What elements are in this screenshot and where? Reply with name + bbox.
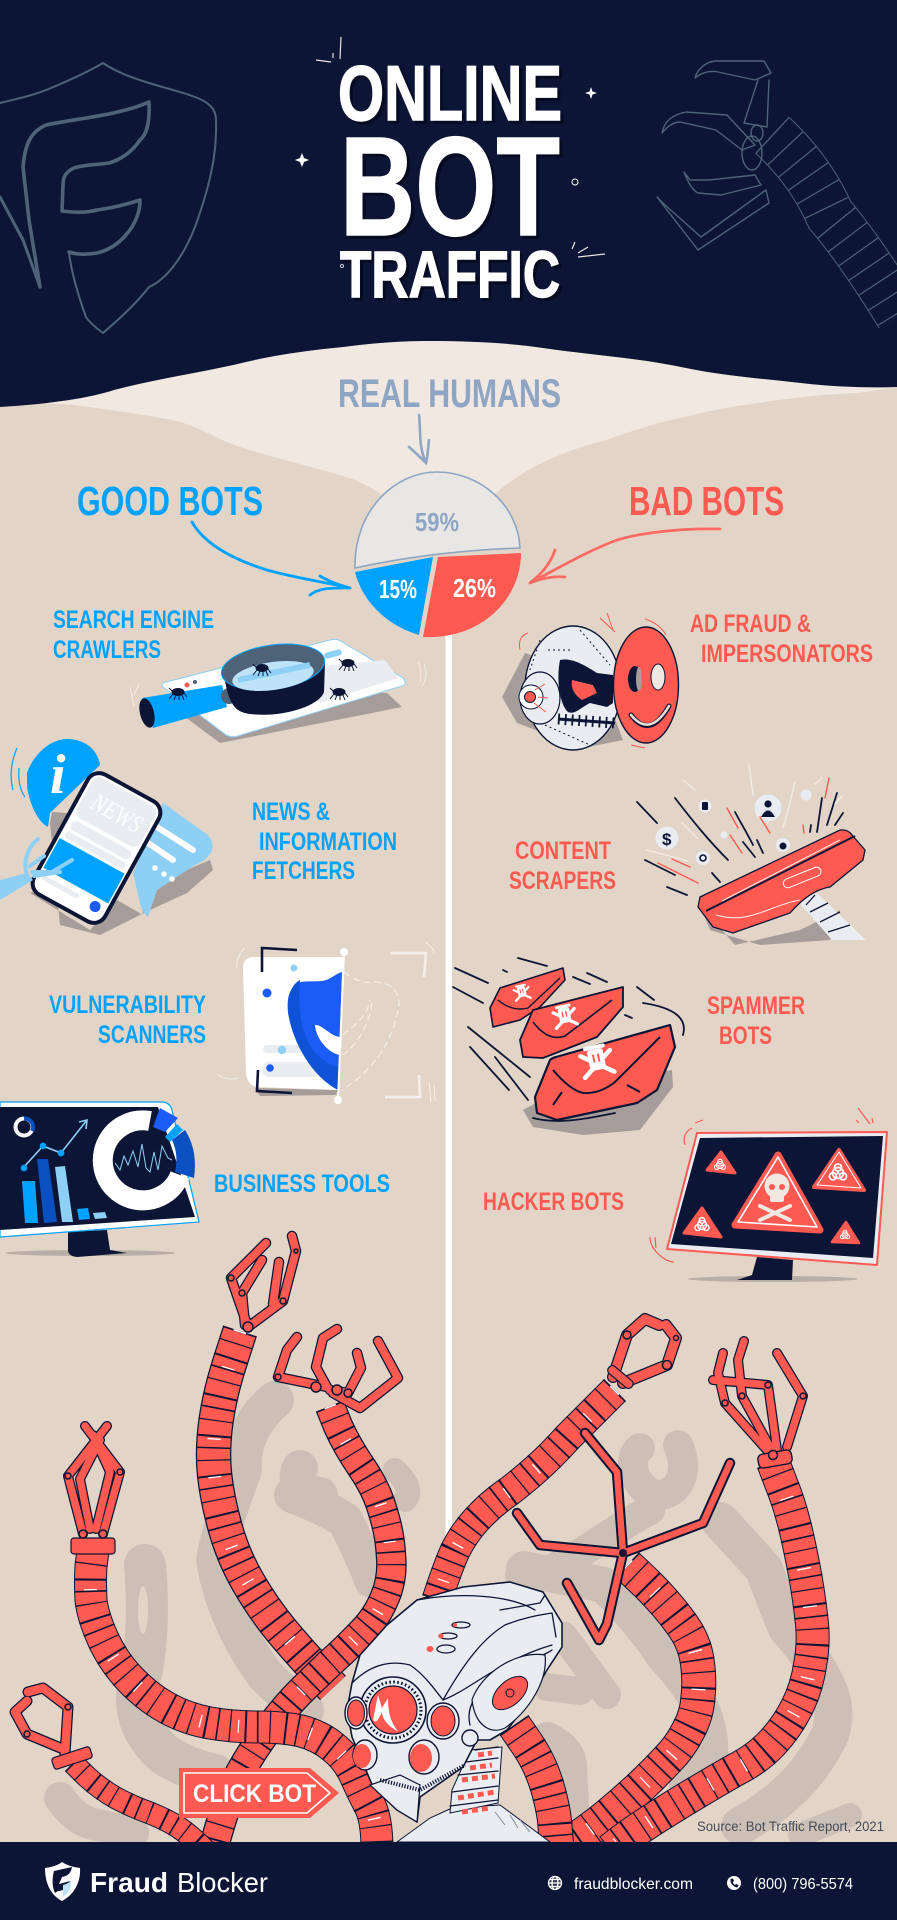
- pie chart: [355, 472, 521, 637]
- contact: phone number: (800) 796-5574: [753, 1876, 853, 1893]
- robot hand: [0, 873, 33, 900]
- pie value 15%: 15%: [379, 574, 417, 604]
- info speech bubble: [27, 739, 100, 827]
- robot arm with long finger claw: [610, 1341, 813, 1850]
- heading: real humans: REAL HUMANS: [338, 372, 561, 416]
- logo: wordmark second part: Blocker: [177, 1867, 268, 1898]
- logo: shield: [45, 1862, 80, 1901]
- good bots labels: INFORMATION: [259, 828, 397, 856]
- title: TRAFFIC: [340, 237, 560, 311]
- robot head: [345, 1582, 562, 1822]
- good bots labels: SEARCH ENGINE: [53, 606, 214, 634]
- donut chart: [103, 1108, 195, 1200]
- jaw: [370, 1775, 420, 1822]
- icon: robot claw sketch: [657, 61, 897, 315]
- header: navy wave panel: [0, 0, 897, 407]
- icon: phone: [727, 1876, 741, 1890]
- bad bots labels: BOTS: [719, 1022, 772, 1050]
- arrow: good bots to pie: [192, 522, 350, 595]
- good bots labels: BUSINESS TOOLS: [214, 1170, 390, 1198]
- robot arm with round pincer: [437, 1319, 678, 1600]
- robot arm with diamond claw: [65, 1426, 377, 1850]
- icon: globe: [548, 1876, 562, 1890]
- bad bots labels: [483, 610, 873, 1216]
- good bots labels: FETCHERS: [252, 857, 355, 885]
- icon: smartphone with news: i: [50, 744, 66, 806]
- icon: vacuum scraper: [637, 765, 866, 945]
- title: ONLINE: [338, 49, 562, 137]
- heading: good bots: GOOD BOTS: [77, 478, 263, 524]
- contact: website: fraudblocker.com: [574, 1876, 693, 1893]
- good bots labels: CRAWLERS: [53, 636, 161, 664]
- arrow: bad bots to pie: [530, 529, 720, 583]
- title: BOT: [340, 107, 560, 265]
- half shield: [288, 972, 342, 1090]
- click bot sign: [179, 1768, 339, 1818]
- heading: bad bots: BAD BOTS: [629, 478, 784, 524]
- arrow: real humans to pie: [409, 415, 429, 463]
- side disc: [472, 1654, 545, 1730]
- shadow: robot arms on background: [60, 1400, 850, 1842]
- icon: magnifying glass over tablet: [130, 638, 426, 743]
- illustration: click bot robot: [15, 1236, 813, 1850]
- robot arm with pincer claw: [15, 1688, 205, 1850]
- click bot sign: CLICK BOT: [193, 1780, 316, 1808]
- main eye: [360, 1677, 426, 1743]
- icon: robot skull and smiley mask: [502, 613, 678, 750]
- good bots labels: NEWS &: [252, 798, 330, 826]
- line chart: [21, 1120, 87, 1171]
- bad bots labels: CONTENT: [515, 837, 611, 865]
- icon: smartphone with news: [0, 739, 213, 935]
- robot arm with star claw: [517, 1433, 730, 1850]
- divider: white centre line: [446, 630, 452, 1590]
- icon: shield sketch: [0, 63, 216, 333]
- pie slice: good bots 15%: [355, 557, 433, 635]
- background: light hill region: [0, 330, 897, 510]
- pie value 26%: 26%: [453, 573, 496, 603]
- bad bots labels: SCRAPERS: [509, 867, 616, 895]
- robot arm with four-prong claw: [213, 1329, 398, 1850]
- robot arm with finger claw: [214, 1236, 333, 1688]
- logo: wordmark: Fraud: [90, 1867, 168, 1898]
- bar chart: [22, 1159, 107, 1223]
- title: [338, 49, 562, 311]
- source note: Source: Bot Traffic Report, 2021: [697, 1819, 884, 1834]
- bad bots labels: SPAMMER: [707, 992, 805, 1020]
- good bots labels: SCANNERS: [98, 1021, 206, 1049]
- icon: spam envelopes: [453, 958, 684, 1135]
- good bots labels: [49, 606, 397, 1198]
- icon: hacked monitor: [650, 1108, 887, 1282]
- pie slice: real humans 59%: [355, 472, 520, 568]
- footer: [0, 1842, 897, 1920]
- icon: analytics monitor: [0, 1102, 199, 1257]
- good bots labels: VULNERABILITY: [49, 991, 206, 1019]
- pie value 59%: 59%: [415, 507, 459, 537]
- pie slice: bad bots 26%: [423, 553, 521, 637]
- icon: vacuum scraper: $: [662, 830, 672, 849]
- bad bots labels: HACKER BOTS: [483, 1188, 624, 1216]
- sparkles around title: [295, 37, 605, 268]
- icon: vulnerability shield scan: [217, 942, 435, 1104]
- helmet lines: [352, 1595, 556, 1725]
- robot arm behind neck: [514, 1725, 557, 1850]
- robot chest and neck: [397, 1747, 550, 1842]
- warning triangles: [684, 1150, 864, 1243]
- side eyes: [345, 1697, 367, 1729]
- bad bots labels: AD FRAUD &: [690, 610, 811, 638]
- message bubble: [133, 803, 212, 917]
- phone body: [28, 768, 165, 928]
- phone body: NEWS: [86, 789, 147, 839]
